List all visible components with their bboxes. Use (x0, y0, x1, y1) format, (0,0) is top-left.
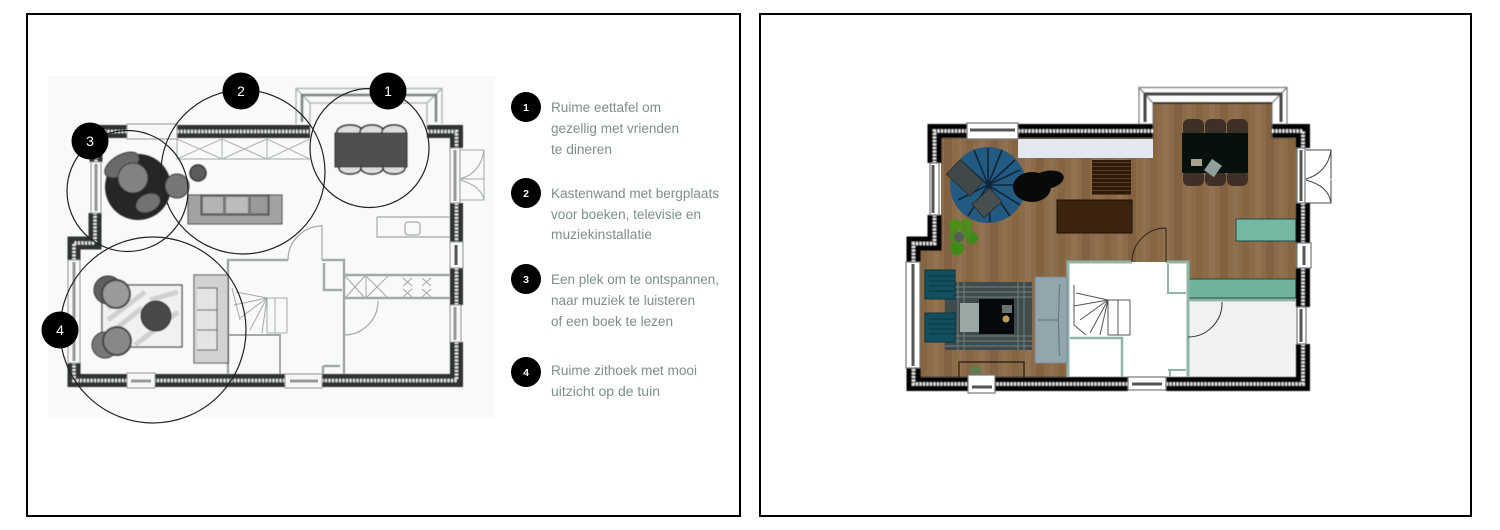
tv unit (959, 362, 1024, 377)
grey-blue sofa (1035, 277, 1067, 363)
sketch lounge rug, chairs, table and sofa (92, 275, 228, 363)
legend item 1: te dineren (551, 142, 612, 157)
legend item 1: gezellig met vrienden (551, 121, 679, 136)
sketch wardrobe wall (177, 139, 310, 159)
panel: sketch floor plan (27, 14, 740, 516)
legend item 2: muziekinstallatie (551, 227, 652, 242)
teal armchairs (925, 270, 955, 342)
legend item 2: Kastenwand met bergplaats (551, 186, 719, 201)
scope circle 3 (67, 130, 188, 252)
blue round rug with armchairs (946, 147, 1026, 223)
badge 2 on plan: 2 (237, 83, 245, 99)
legend item 4: uitzicht op de tuin (551, 384, 660, 399)
legend item 2: voor boeken, televisie en (551, 207, 701, 222)
sketch interior partitions and doors (228, 150, 484, 374)
white wardrobe wall (1018, 139, 1153, 158)
legend item 3: of een boek te lezen (551, 314, 673, 329)
brown striped rug (1092, 160, 1131, 195)
legend item 1: 1 (523, 102, 529, 114)
sketch walls (74, 88, 456, 380)
legend item 2 (511, 178, 719, 242)
teal counter in hallway (1189, 279, 1296, 298)
brown media table (1057, 200, 1132, 233)
legend item 4 (511, 357, 697, 399)
badge 4 on plan (42, 312, 78, 348)
dining table with chairs (1182, 119, 1248, 186)
badge 4 on plan: 4 (56, 322, 64, 338)
badge 2 on plan (222, 72, 260, 110)
badge 1 on plan: 1 (384, 83, 392, 99)
legend item 2: 2 (523, 188, 529, 200)
coloured partitions and doors (1068, 150, 1331, 377)
legend item 3: 3 (523, 274, 529, 286)
lounge rug and coffee table (945, 282, 1032, 350)
paper background (48, 76, 495, 418)
panel: coloured floor plan (760, 14, 1471, 516)
badge 3 on plan: 3 (86, 133, 94, 149)
legend item 1 (511, 92, 679, 157)
black side tables (1013, 168, 1065, 202)
wood floor (920, 103, 1297, 377)
teal kitchen island (1236, 219, 1296, 241)
legend item 4: 4 (523, 367, 529, 379)
badge 3 on plan (72, 122, 108, 160)
legend item 1: Ruime eettafel om (551, 100, 661, 115)
legend item 3: Een plek om te ontspannen, (551, 272, 719, 287)
legend item 3: naar muziek te luisteren (551, 293, 695, 308)
sketch sofa (188, 195, 282, 224)
scope circle 2 (161, 90, 325, 254)
sketch windows (68, 124, 463, 388)
sketch dining table (335, 125, 407, 174)
legend item 3 (511, 264, 719, 329)
scope circle 1 (310, 88, 429, 208)
sketch round rug with chairs (101, 147, 206, 220)
entrance floor (1189, 302, 1296, 377)
scope circle 4 (60, 237, 246, 423)
coloured walls (914, 88, 1303, 384)
badge 1 on plan (370, 72, 406, 110)
coloured windows (906, 123, 1311, 393)
legend item 4: Ruime zithoek met mooi (551, 363, 697, 378)
plant (949, 219, 978, 255)
